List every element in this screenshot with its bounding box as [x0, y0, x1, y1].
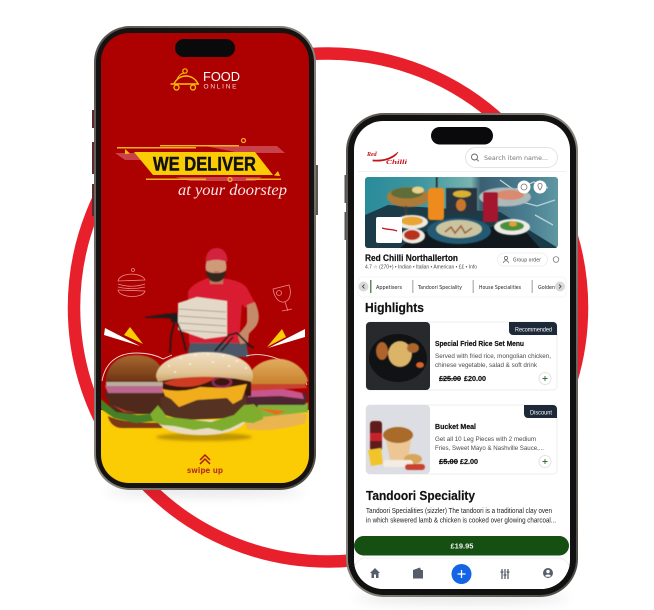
group order button: Group order — [513, 258, 541, 264]
category tabs: Tandoori Speciality — [417, 285, 462, 291]
menu card: bucket meal: Get all 10 Leg Pieces with 2 medium — [435, 436, 536, 443]
category tabs: Golden — [538, 285, 555, 291]
phone: food online splash screen — [92, 26, 318, 495]
swipe up control: swipe up — [187, 466, 224, 475]
menu card: special fried rice: £20.00 — [464, 376, 486, 383]
burger outline — [102, 353, 307, 385]
heading: tandoori speciality: Tandoori Speciality — [366, 488, 476, 503]
category tabs — [358, 277, 566, 297]
button: add — [452, 564, 472, 584]
icon: home — [370, 568, 380, 578]
category tabs: House Specialities — [479, 285, 521, 291]
basket total bar: £19.95 — [451, 542, 473, 550]
search box: Search item name... — [484, 154, 548, 162]
camera notch — [175, 39, 235, 57]
tagline: at your doorstep: at your doorstep — [178, 182, 287, 199]
logo: food online: FOOD — [203, 69, 240, 84]
group order button — [498, 253, 548, 266]
restaurant name: Red Chilli Northallerton — [365, 253, 458, 263]
red ring background — [74, 54, 582, 562]
burger: right — [245, 359, 308, 430]
burger: center — [150, 352, 263, 441]
delivery man with pizza boxes — [145, 248, 259, 357]
restaurant meta: 4.7 ☆ (270+) • Indian • Italian • American • ££ • Info — [365, 264, 477, 270]
menu card: bucket meal: £2.00 — [460, 459, 478, 466]
logo: food online — [170, 69, 240, 90]
hero action icons — [518, 180, 546, 194]
menu card: special fried rice — [366, 322, 557, 390]
bottom navigation — [354, 558, 570, 589]
menu card: bucket meal: £5.00 — [439, 459, 458, 466]
icon: profile — [543, 568, 553, 578]
logo: red chilli: Chilli — [386, 160, 407, 166]
menu card: special fried rice: Recommended — [515, 328, 552, 334]
burger: left — [101, 355, 164, 428]
menu card: special fried rice: Special Fried Rice Set Menu — [435, 341, 524, 348]
section description: in which skewered lamb & chicken is cooked over glowing charcoal... — [366, 518, 556, 524]
menu card: bucket meal: Fries, Sweet Mayo & Nashville Sauce,... — [435, 445, 544, 452]
phone: restaurant ordering screen — [344, 113, 578, 602]
logo: food online: ONLINE — [204, 84, 237, 90]
menu card: bucket meal: Discount — [530, 410, 552, 416]
basket total bar — [354, 536, 569, 556]
section description — [366, 508, 556, 524]
camera notch — [431, 127, 493, 144]
logo: red chilli: Red — [366, 152, 378, 158]
doodle: wine glass — [273, 285, 292, 311]
menu card: special fried rice: Served with fried rice, mongolian chicken, — [435, 353, 551, 360]
logo: red chilli — [367, 152, 407, 164]
icon: wallet — [413, 568, 423, 578]
icon: utensils — [500, 569, 510, 579]
category tabs: Appetisers — [376, 285, 402, 291]
clock icon — [553, 257, 559, 262]
menu card: special fried rice: £25.00 — [439, 376, 461, 383]
menu card: bucket meal — [366, 405, 557, 474]
heading: highlights: Highlights — [365, 300, 424, 315]
banner: we deliver: WE DELIVER — [153, 154, 256, 176]
hero restaurant logo tile — [376, 217, 402, 243]
hero photo: restaurant table — [365, 177, 558, 248]
menu card: bucket meal: Bucket Meal — [435, 424, 476, 431]
menu card: special fried rice: chinese vegetable, salad & soft drink — [435, 362, 538, 369]
banner: we deliver — [115, 138, 285, 182]
search box — [466, 148, 558, 168]
swipe up control — [187, 455, 224, 475]
accent spikes — [104, 327, 305, 348]
section description: Tandoori Specialities (sizzler) The tandoori is a traditional clay oven — [366, 508, 552, 515]
doodle: burger — [118, 268, 145, 297]
